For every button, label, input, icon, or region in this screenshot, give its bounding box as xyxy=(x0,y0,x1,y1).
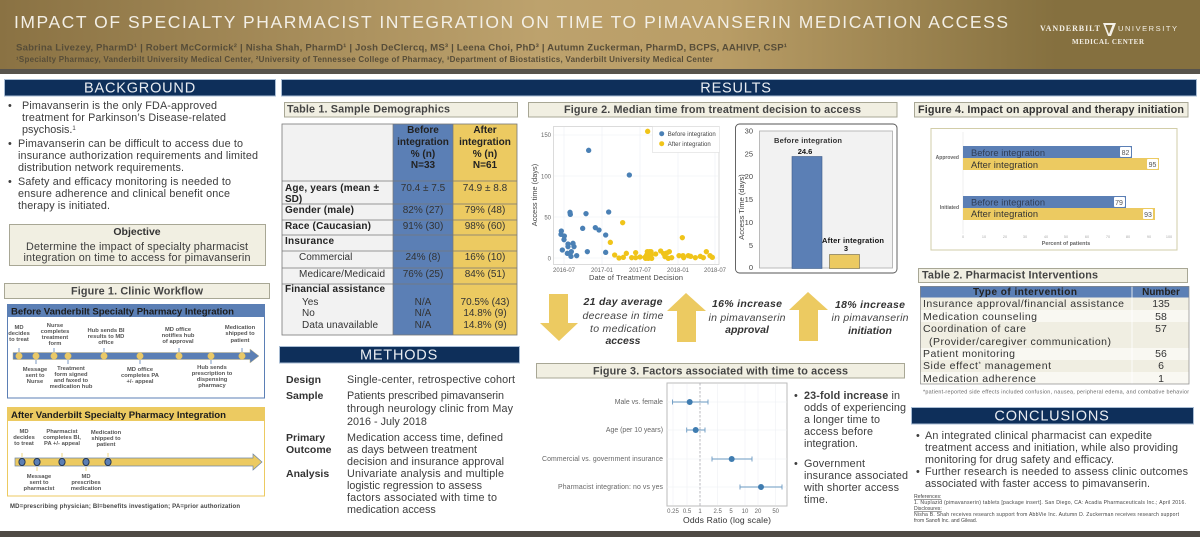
bar chart: median access time: Access Time (days) xyxy=(737,174,746,240)
table 1 grid: 74.9 ± 8.8 xyxy=(463,183,508,194)
horizontal bar chart: 80 xyxy=(1126,235,1130,239)
section: background xyxy=(4,80,276,266)
scatter legend: Before integration xyxy=(668,132,716,138)
figure 2: median time to access xyxy=(528,102,897,282)
horizontal bar chart: After integration xyxy=(971,209,1038,219)
references and disclosures: References: xyxy=(914,494,941,500)
scatter axes: 2016-07 xyxy=(553,268,576,274)
table 1 grid: Age, years (mean ± xyxy=(285,183,380,194)
methods heading: METHODS xyxy=(360,348,438,364)
callout: 16 percent approval xyxy=(708,298,786,336)
forest plot: odds ratios xyxy=(542,383,787,525)
figure 3 takeaways: time. xyxy=(804,494,828,506)
methods rows: 2016 - July 2018 xyxy=(347,416,427,428)
forest plot: odds ratios: 1 xyxy=(698,509,702,515)
after timeline labels: shipped to xyxy=(91,436,121,442)
table 2 heading xyxy=(918,268,1188,282)
results heading xyxy=(282,80,1196,96)
table 2 grid xyxy=(920,286,1189,385)
figure 3 takeaways: • xyxy=(794,390,798,402)
methods rows: Analysis xyxy=(286,468,329,480)
figure 3 takeaways: odds of experiencing xyxy=(804,402,906,414)
table 1 grid: % (n) xyxy=(473,149,497,160)
callout: 18 percent initiation: in pimavanserin xyxy=(832,312,909,324)
footer band xyxy=(0,531,1200,537)
header banner xyxy=(0,0,1200,74)
scatter plot: access time by treatment date xyxy=(530,126,727,282)
bar chart: median access time: 15 xyxy=(745,195,753,204)
before timeline labels: Medication xyxy=(225,325,256,331)
objective box: Determine the impact of specialty pharmacist xyxy=(26,241,248,253)
forest plot: odds ratios: Odds Ratio (log scale) xyxy=(683,515,771,525)
bar chart: median access time: 20 xyxy=(745,172,753,181)
table 1 grid: Yes xyxy=(302,297,318,308)
panel: after integration workflow xyxy=(7,407,265,496)
before timeline labels: dispensing xyxy=(197,377,228,383)
panel: after integration workflow: After Vanderbilt Specialty Pharmacy Integration xyxy=(11,410,226,421)
figure 4 heading: Figure 4. Impact on approval and therapy initiation xyxy=(918,104,1184,116)
table 2 grid: Coordination of care xyxy=(923,323,1026,335)
table 1 grid: 91% (30) xyxy=(403,221,443,232)
before timeline labels: shipped to xyxy=(225,331,255,337)
forest plot: odds ratios: Commercial vs. government insurance xyxy=(542,456,663,463)
before timeline labels: office xyxy=(98,340,115,346)
after timeline labels: Message xyxy=(27,474,52,480)
table 2 grid: Medication adherence xyxy=(923,373,1036,385)
scatter points xyxy=(558,129,715,261)
table 1 grid: After xyxy=(473,125,497,136)
after timeline labels: Medication xyxy=(91,430,122,436)
callout: 21 day decrease: 21 day average xyxy=(582,296,663,308)
callouts: key findings xyxy=(540,292,909,347)
background bullets: • xyxy=(8,138,12,150)
table 1 grid: 24% (8) xyxy=(405,252,441,263)
horizontal bar chart: After integration xyxy=(971,160,1038,170)
background bullets: psychosis. xyxy=(22,124,72,136)
before timeline labels: Nurse xyxy=(27,379,44,385)
forest plot: odds ratios: 20 xyxy=(755,509,762,515)
table 2 heading: Table 2. Pharmacist Interventions xyxy=(922,270,1098,282)
background bullets: distribution network requirements. xyxy=(18,162,184,174)
before timeline labels: completes xyxy=(41,329,69,335)
table 1 grid: 79% (48) xyxy=(465,205,505,216)
methods rows: decision and insurance approval xyxy=(347,456,504,468)
horizontal bar chart xyxy=(931,128,1177,250)
horizontal bar chart: 30 xyxy=(1023,235,1027,239)
horizontal bar chart: 40 xyxy=(1044,235,1048,239)
background heading xyxy=(4,80,276,96)
section: conclusions xyxy=(912,408,1194,524)
horizontal bar chart: 90 xyxy=(1147,235,1151,239)
scatter axes: 2017-01 xyxy=(591,268,614,274)
forest plot: odds ratios: 0.25 xyxy=(667,509,679,515)
objective box: integration on time to access for pimavanserin xyxy=(24,252,250,264)
horizontal bar chart: 0 xyxy=(962,235,964,239)
before timeline labels: medication hub xyxy=(50,384,93,390)
callout: 18 percent initiation xyxy=(832,299,909,337)
bar chart: median access time: 24.6 xyxy=(798,147,812,156)
methods rows: Univariate analysis and multiple xyxy=(347,468,504,480)
table 1 grid: integration xyxy=(459,137,511,148)
table 1 grid: Medicare/Medicaid xyxy=(299,269,385,280)
horizontal bar chart: 20 xyxy=(1003,235,1007,239)
logo: Vanderbilt University Medical Center: VANDERBILT xyxy=(1040,24,1101,33)
callout: 21 day decrease: to medication xyxy=(590,323,656,335)
horizontal bar chart: 95 xyxy=(1149,162,1156,169)
table 2 grid: Type of intervention xyxy=(973,287,1077,298)
forest plot: odds ratios: 2.5 xyxy=(714,509,723,515)
before timeline labels: MD office xyxy=(165,327,192,333)
table 1 grid: 84% (51) xyxy=(465,269,505,280)
after timeline labels: MD xyxy=(81,474,91,480)
background bullets: Pimavanserin can be difficult to access due to xyxy=(18,138,243,150)
figure 3 takeaways: with shorter access xyxy=(803,482,900,494)
before timeline labels: patient xyxy=(230,338,250,344)
after timeline labels: patient xyxy=(96,442,116,448)
methods rows: Medication access time, defined xyxy=(347,432,503,444)
logo: Vanderbilt University Medical Center: UNIVERSITY xyxy=(1118,24,1177,33)
before timeline labels: notifies hub xyxy=(162,333,195,339)
table 1 grid: 76% (25) xyxy=(403,269,443,280)
table 1 heading xyxy=(284,102,518,117)
background bullets xyxy=(8,100,258,212)
conclusions bullets: treatment access and initiation, while also providing xyxy=(925,442,1178,454)
table 1 grid: 14.8% (9) xyxy=(463,308,507,319)
table 1 grid: N/A xyxy=(415,308,432,319)
scatter axes: Date of Treatment Decision xyxy=(589,273,683,282)
references and disclosures: Disclosures: xyxy=(914,506,942,512)
figure 3 heading xyxy=(536,364,904,378)
table 2 grid: * xyxy=(978,362,981,368)
figure 1: clinic workflow xyxy=(4,284,270,510)
before timeline labels xyxy=(8,323,256,390)
figure 3 takeaways: 23-fold increase in xyxy=(804,390,900,402)
methods rows xyxy=(286,374,515,516)
table 1 grid: Gender (male) xyxy=(285,205,354,216)
methods heading xyxy=(280,346,520,364)
horizontal bar chart: 100 xyxy=(1166,235,1172,239)
methods rows: Single-center, retrospective cohort xyxy=(347,374,515,386)
conclusions heading xyxy=(912,408,1194,424)
after timeline labels: sent to xyxy=(29,480,49,486)
table 1 heading: Table 1. Sample Demographics xyxy=(287,104,450,116)
table 1 grid: N/A xyxy=(415,320,432,331)
background bullets: ensure adherence and clinical benefit once xyxy=(18,188,230,200)
table 2 grid: Number xyxy=(1142,287,1180,298)
forest plot: odds ratios: Male vs. female xyxy=(615,399,663,406)
objective box: Objective xyxy=(113,226,161,238)
table 1 grid: N=61 xyxy=(473,160,498,171)
conclusions bullets: monitoring for drug safety and efficacy. xyxy=(925,454,1114,466)
bar chart: median access time: 10 xyxy=(745,218,753,227)
horizontal bar chart: 10 xyxy=(982,235,986,239)
background bullets: therapy is initiated. xyxy=(18,200,110,212)
arrow: increase in approval xyxy=(667,293,706,342)
table 2 grid: Insurance approval/financial assistance xyxy=(923,298,1124,310)
before timeline labels: form xyxy=(49,341,61,347)
scatter axes: 2018-07 xyxy=(704,268,727,274)
table 2 grid: 135 xyxy=(1152,298,1170,310)
after timeline arrow xyxy=(15,453,262,471)
bar chart: median access time xyxy=(736,124,897,273)
table 2 footnote: *patient-reported side effects included confusion, nausea, peripheral edema, and combative behavior xyxy=(923,390,1189,396)
bar chart: median access time: 5 xyxy=(749,241,753,250)
panel: before integration workflow: Before Vanderbilt Specialty Pharmacy Integration xyxy=(11,306,234,318)
figure 3 takeaways: insurance associated xyxy=(804,470,908,482)
figure 4: impact on approval and initiation xyxy=(914,102,1188,250)
scatter axes: Access time (days) xyxy=(530,164,539,226)
scatter axes: 100 xyxy=(541,174,552,180)
bar chart: median access time: 3 xyxy=(844,244,848,253)
table 1 grid: Financial assistance xyxy=(285,284,385,295)
conclusions bullets: associated with faster access to pimavanserin. xyxy=(925,478,1150,490)
background bullets: Safety and efficacy monitoring is needed to xyxy=(18,176,231,188)
figure 2 heading: Figure 2. Median time from treatment decision to access xyxy=(564,104,861,116)
before timeline labels: sent to xyxy=(25,373,45,379)
table 1 grid: % (n) xyxy=(411,149,435,160)
table 2: pharmacist interventions xyxy=(918,268,1189,396)
section: methods xyxy=(280,346,520,516)
table 2 grid: (Provider/caregiver communication) xyxy=(929,336,1111,348)
figure 3 takeaways: a longer time to xyxy=(804,414,880,426)
panel: before integration workflow xyxy=(7,304,265,398)
methods rows: Design xyxy=(286,374,321,386)
figure 3 takeaways: integration. xyxy=(804,438,858,450)
table 1 grid: Commercial xyxy=(299,252,352,263)
figure 3: factors associated with time to access xyxy=(536,364,908,525)
bar chart: median access time: 30 xyxy=(745,126,753,136)
workflow abbreviations footnote: MD=prescribing physician; BI=benefits investigation; PA=prior authorization xyxy=(10,504,240,510)
before timeline labels: MD office xyxy=(127,367,154,373)
bar chart: median access time: Before integration xyxy=(774,136,842,145)
after timeline labels xyxy=(13,429,122,492)
forest plot: odds ratios: Age (per 10 years) xyxy=(606,427,663,434)
after timeline labels: decides xyxy=(13,435,35,441)
references and disclosures: 1. Nuplazid (pimavanserin) tablets [package insert]. San Diego, CA: Acadia Pharmaceuticals Inc.; April 2016. xyxy=(914,500,1186,506)
table 1 grid: Race (Caucasian) xyxy=(285,221,371,232)
figure 1 heading: Figure 1. Clinic Workflow xyxy=(71,286,204,298)
logo: Vanderbilt University Medical Center xyxy=(1040,23,1177,46)
before timeline labels: decides xyxy=(8,331,30,337)
bar chart: median access time: After integration xyxy=(822,236,884,245)
figure 3 takeaways: Government xyxy=(804,458,865,470)
before timeline labels: to treat xyxy=(9,337,29,343)
table 1 grid: 16% (10) xyxy=(465,252,505,263)
table 1 grid xyxy=(282,124,517,335)
methods rows: Outcome xyxy=(286,444,332,456)
table 2 grid: 6 xyxy=(1158,360,1164,372)
table 1 grid: 98% (60) xyxy=(465,221,505,232)
methods rows: as days between treatment xyxy=(347,444,477,456)
conclusions bullets: Further research is needed to assess clinic outcomes xyxy=(925,466,1189,478)
before timeline arrow xyxy=(13,348,259,364)
methods rows: factors associated with time to xyxy=(347,492,497,504)
table 2 grid: Medication counseling xyxy=(923,311,1037,323)
callout: 16 percent approval: in pimavanserin xyxy=(708,312,786,324)
conclusions heading: CONCLUSIONS xyxy=(994,408,1110,424)
table 2 grid: management xyxy=(981,360,1051,372)
before timeline labels: completes PA xyxy=(121,373,160,379)
table 2 grid: Side effect xyxy=(923,360,978,372)
before timeline labels: results to MD xyxy=(88,334,124,340)
methods rows: medication access xyxy=(347,504,436,516)
after timeline labels: Pharmacist xyxy=(46,429,78,435)
before timeline labels: Hub sends xyxy=(197,365,227,371)
scatter legend xyxy=(652,126,720,152)
methods rows: Sample xyxy=(286,390,324,402)
table 1 grid: 70.4 ± 7.5 xyxy=(401,183,446,194)
scatter legend: After integration xyxy=(668,142,711,148)
background bullets: treatment for Parkinson’s Disease-related xyxy=(22,112,226,124)
table 1 grid: Data unavailable xyxy=(302,320,378,331)
background bullets: insurance authorization requirements and limited xyxy=(18,150,258,162)
before timeline labels: Nurse xyxy=(47,323,64,329)
horizontal bar chart: Before integration xyxy=(971,198,1045,208)
horizontal bar chart: 93 xyxy=(1144,212,1152,219)
authors: Sabrina Livezey, PharmD¹ | Robert McCormick² | Nisha Shah, PharmD¹ | Josh DeClercq, MS³ | Leena Choi, PhD³ | Autumn Zuckerman, PharmD, BCPS, AAHIVP, CSP¹ xyxy=(16,42,787,54)
figure 3 takeaways: • xyxy=(794,458,798,470)
background heading: BACKGROUND xyxy=(84,80,196,96)
callout: 21 day decrease xyxy=(582,296,664,347)
methods rows: logistic regression to assess xyxy=(347,480,483,492)
before timeline labels: Hub sends BI xyxy=(87,328,125,334)
after timeline labels: completes BI, xyxy=(43,435,81,441)
table 1 grid: SD) xyxy=(285,194,302,205)
figure 3 takeaways xyxy=(794,390,908,506)
table 2 grid: 1 xyxy=(1158,373,1164,385)
before timeline labels: treatment xyxy=(42,335,68,341)
logo: Vanderbilt University Medical Center: MEDICAL CENTER xyxy=(1072,38,1145,46)
references and disclosures xyxy=(914,494,1186,524)
table 1 grid: Insurance xyxy=(285,236,334,247)
references and disclosures: Nisha B. Shah receives research support from AbbVie Inc. Autumn D. Zuckerman receives research support xyxy=(914,512,1180,518)
before timeline labels: Treatment xyxy=(57,366,85,372)
table 1 grid: N=33 xyxy=(411,160,436,171)
arrow: decrease in access time xyxy=(540,294,578,341)
bar chart: median access time: 25 xyxy=(745,150,753,158)
table 1: sample demographics xyxy=(282,102,518,335)
after timeline labels: to treat xyxy=(14,441,34,447)
conclusions bullets: • xyxy=(916,430,920,442)
scatter axes: 50 xyxy=(544,216,552,222)
table 2 grid: Patient monitoring xyxy=(923,348,1015,360)
table 1 grid: No xyxy=(302,308,315,319)
before timeline labels: +/- appeal xyxy=(127,379,154,385)
horizontal bar chart: 50 xyxy=(1064,235,1068,239)
conclusions bullets: • xyxy=(916,466,920,478)
table 1 grid: 70.5% (43) xyxy=(461,297,509,308)
callout: 18 percent initiation: 18% increase xyxy=(835,299,905,311)
forest plot: odds ratios: 0.5 xyxy=(683,509,692,515)
forest plot: odds ratios: 50 xyxy=(772,509,780,515)
background bullets: 1 xyxy=(72,126,76,132)
figure 3 takeaways: access before xyxy=(804,426,873,438)
callout: 16 percent approval: approval xyxy=(725,324,770,336)
callout: 18 percent initiation: initiation xyxy=(848,325,892,337)
before timeline labels: Message xyxy=(23,367,48,373)
background bullets: Pimavanserin is the only FDA-approved xyxy=(22,100,217,112)
callout: 21 day decrease: access xyxy=(605,335,641,347)
before timeline labels: form signed xyxy=(54,372,88,378)
affiliations: ¹Specialty Pharmacy, Vanderbilt University Medical Center, ²University of Tennessee College of Pharmacy, ³Department of Biostatistics, Vanderbilt University Medical Center xyxy=(16,55,713,64)
objective box xyxy=(10,224,266,266)
references and disclosures: from Sanofi Inc. and Gilead. xyxy=(914,518,977,524)
forest plot: odds ratios: 5 xyxy=(729,509,733,515)
horizontal bar chart: 82 xyxy=(1122,150,1129,157)
after timeline labels: pharmacist xyxy=(24,486,55,492)
scatter axes: 150 xyxy=(541,133,552,139)
methods rows: Patients prescribed pimavanserin xyxy=(347,390,504,402)
horizontal bar chart: Before integration xyxy=(971,148,1045,158)
table 1 grid: Before xyxy=(407,125,439,136)
table 2 grid: 57 xyxy=(1155,323,1167,335)
arrow: increase in initiation xyxy=(789,292,828,341)
methods rows: through neurology clinic from May xyxy=(347,403,514,415)
callout: 21 day decrease: decrease in time xyxy=(582,310,664,322)
table 1 grid: N/A xyxy=(415,297,432,308)
callout: 16 percent approval: 16% increase xyxy=(712,298,782,310)
scatter axes: 2018-01 xyxy=(667,268,690,274)
table 1 grid: 82% (27) xyxy=(403,205,443,216)
horizontal bar chart: Initiated xyxy=(940,205,959,211)
after timeline labels: prescribes xyxy=(71,480,101,486)
horizontal bar chart: 70 xyxy=(1106,235,1110,239)
methods rows: Primary xyxy=(286,432,325,444)
table 2 grid: 56 xyxy=(1155,348,1167,360)
bar chart: median access time: 0 xyxy=(749,263,753,272)
before timeline labels: pharmacy xyxy=(198,383,226,389)
scatter axes xyxy=(530,133,727,282)
after timeline labels: medication xyxy=(71,486,102,492)
results heading: RESULTS xyxy=(700,80,772,96)
horizontal bar chart: Percent of patients xyxy=(1042,241,1090,247)
before timeline labels: prescription to xyxy=(192,371,233,377)
figure 3 heading: Figure 3. Factors associated with time to access xyxy=(593,366,848,378)
before timeline labels: MD xyxy=(14,325,24,331)
horizontal bar chart: 60 xyxy=(1085,235,1089,239)
before timeline labels: of approval xyxy=(162,339,194,345)
figure 2 heading xyxy=(528,102,897,117)
forest plot: odds ratios: 10 xyxy=(742,509,749,515)
title: IMPACT OF SPECIALTY PHARMACIST INTEGRATION ON TIME TO PIMAVANSERIN MEDICATION ACCESS xyxy=(14,12,1008,32)
scatter axes: 2017-07 xyxy=(629,268,652,274)
figure 1 heading xyxy=(4,284,270,298)
scatter axes: 0 xyxy=(548,256,552,262)
after timeline labels: MD xyxy=(19,429,29,435)
table 1 grid: 14.8% (9) xyxy=(463,320,507,331)
conclusions bullets xyxy=(916,430,1189,490)
after timeline labels: PA +/- appeal xyxy=(44,441,80,447)
before timeline labels: and faxed to xyxy=(54,378,89,384)
horizontal bar chart: 79 xyxy=(1115,200,1123,207)
table 2 grid: 58 xyxy=(1155,311,1167,323)
forest plot: odds ratios: Pharmacist integration: no vs yes xyxy=(558,484,664,491)
conclusions bullets: An integrated clinical pharmacist can expedite xyxy=(925,430,1152,442)
horizontal bar chart: Approved xyxy=(936,155,959,161)
background bullets: • xyxy=(8,100,12,112)
background bullets: • xyxy=(8,176,12,188)
table 1 grid: integration xyxy=(397,137,449,148)
